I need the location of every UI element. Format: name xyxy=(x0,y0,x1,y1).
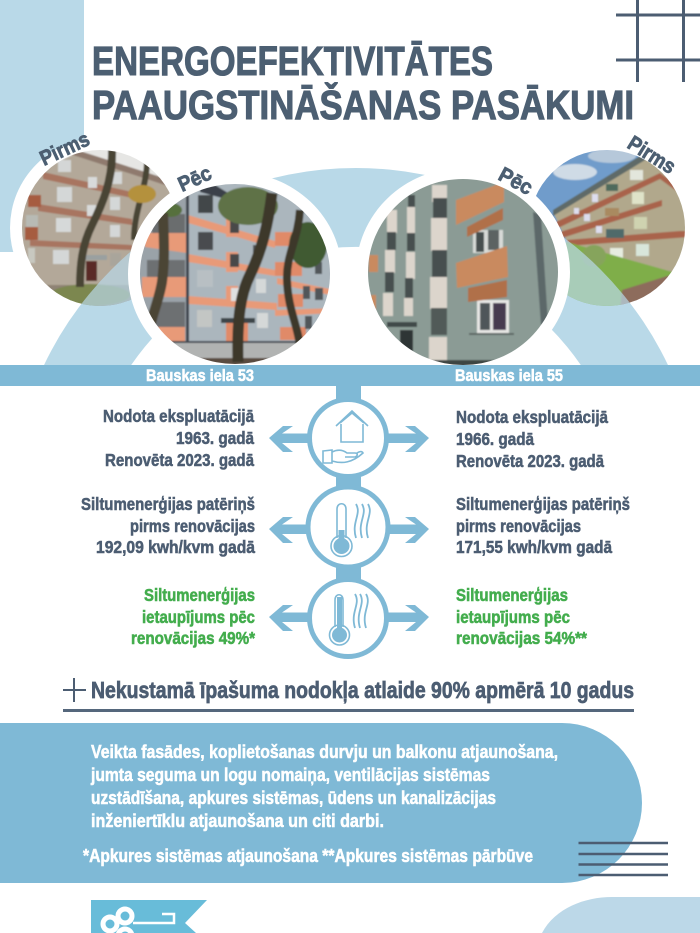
works description xyxy=(90,741,558,831)
text block: left savings: Siltumenerģijas xyxy=(144,585,255,605)
text block: right commissioning dates: 1966. gadā xyxy=(456,429,534,449)
title: ENERGOEFEKTIVITĀTES xyxy=(92,38,493,84)
text block: left heat consumption: Siltumenerģijas patēriņš xyxy=(81,494,255,514)
center band xyxy=(0,365,700,386)
white ring behind left before photo xyxy=(10,138,190,318)
icon: plus xyxy=(63,678,86,702)
photo: Bauskas iela 53 after renovation xyxy=(135,180,335,370)
icon: thermometer with heat waves, savings xyxy=(310,580,386,656)
photo: Bauskas iela 55 after renovation xyxy=(365,175,565,370)
text block: right heat consumption: Siltumenerģijas patēriņš xyxy=(456,494,630,514)
central icon column xyxy=(269,386,429,656)
text block: left heat consumption: 192,09 kwh/kvm gadā xyxy=(96,537,255,557)
works description: Veikta fasādes, koplietošanas durvju un balkonu atjaunošana, xyxy=(91,741,558,762)
icon: thermometer with heat waves, consumption xyxy=(308,487,388,567)
decorative grid top right xyxy=(616,0,700,82)
text block: left heat consumption: pirms renovācijas xyxy=(130,516,255,536)
text block: right commissioning dates: Renovēta 2023. gadā xyxy=(456,451,604,471)
text block: right savings: Siltumenerģijas xyxy=(456,585,568,605)
text block: left heat consumption xyxy=(81,494,255,557)
text block: right savings: ietaupījums pēc xyxy=(456,607,570,627)
label: Pirms left: Pirms xyxy=(36,128,93,171)
background: bottom-right light-blue shape xyxy=(542,897,700,933)
text block: right savings xyxy=(456,585,587,648)
icon: key badge xyxy=(91,900,207,933)
works description: jumta seguma un logu nomaiņa, ventilācijas sistēmas xyxy=(90,764,490,785)
background: light-blue arch xyxy=(44,168,668,365)
arrows: row 3 xyxy=(269,605,429,631)
text block: right heat consumption: pirms renovācijas xyxy=(456,516,581,536)
text block: right commissioning dates: Nodota ekspluatācijā xyxy=(456,407,608,427)
text block: right commissioning dates xyxy=(456,407,608,471)
text block: left commissioning dates: Nodota ekspluatācijā xyxy=(103,406,254,426)
text block: left savings xyxy=(131,585,255,648)
label: Pēc right: Pēc xyxy=(495,163,537,200)
text block: right heat consumption: 171,55 kwh/kvm gadā xyxy=(456,537,612,557)
works description: uzstādīšana, apkures sistēmas, ūdens un kanalizācijas xyxy=(91,787,496,808)
label: Pēc left: Pēc xyxy=(175,162,215,197)
background: left light-blue block xyxy=(0,0,84,252)
text block: left commissioning dates: 1963. gadā xyxy=(176,428,254,448)
decorative lines xyxy=(578,843,668,875)
arrows: row 1 xyxy=(269,426,429,452)
arch overlay on right photo xyxy=(564,238,630,306)
works description: inženiertīklu atjaunošana un citi darbi. xyxy=(91,810,384,831)
white ring behind after photo, right xyxy=(359,175,570,330)
text block: right heat consumption xyxy=(456,494,630,557)
arch overlay on left photo xyxy=(82,252,132,306)
photo: Bauskas iela 55 before renovation xyxy=(536,150,685,306)
icon: house in hand xyxy=(310,400,386,476)
building address left: Bauskas iela 53 xyxy=(146,366,254,385)
white ring behind after photo, left xyxy=(128,178,338,338)
panel: works carried out xyxy=(0,723,642,883)
building address right: Bauskas iela 55 xyxy=(455,366,563,385)
label: Pirms right: Pirms xyxy=(623,132,680,179)
text block: left commissioning dates: Renovēta 2023. gadā xyxy=(105,450,254,470)
text block: right savings: renovācijas 54%** xyxy=(456,628,587,648)
text block: left savings: ietaupījums pēc xyxy=(142,607,255,627)
title xyxy=(92,38,634,128)
arrows: row 2 xyxy=(269,517,429,543)
text block: left savings: renovācijas 49%* xyxy=(131,628,255,648)
footnotes: *Apkures sistēmas atjaunošana **Apkures sistēmas pārbūve xyxy=(83,845,533,866)
photo: Bauskas iela 53 before renovation xyxy=(22,150,170,306)
text block: left commissioning dates xyxy=(103,406,254,470)
